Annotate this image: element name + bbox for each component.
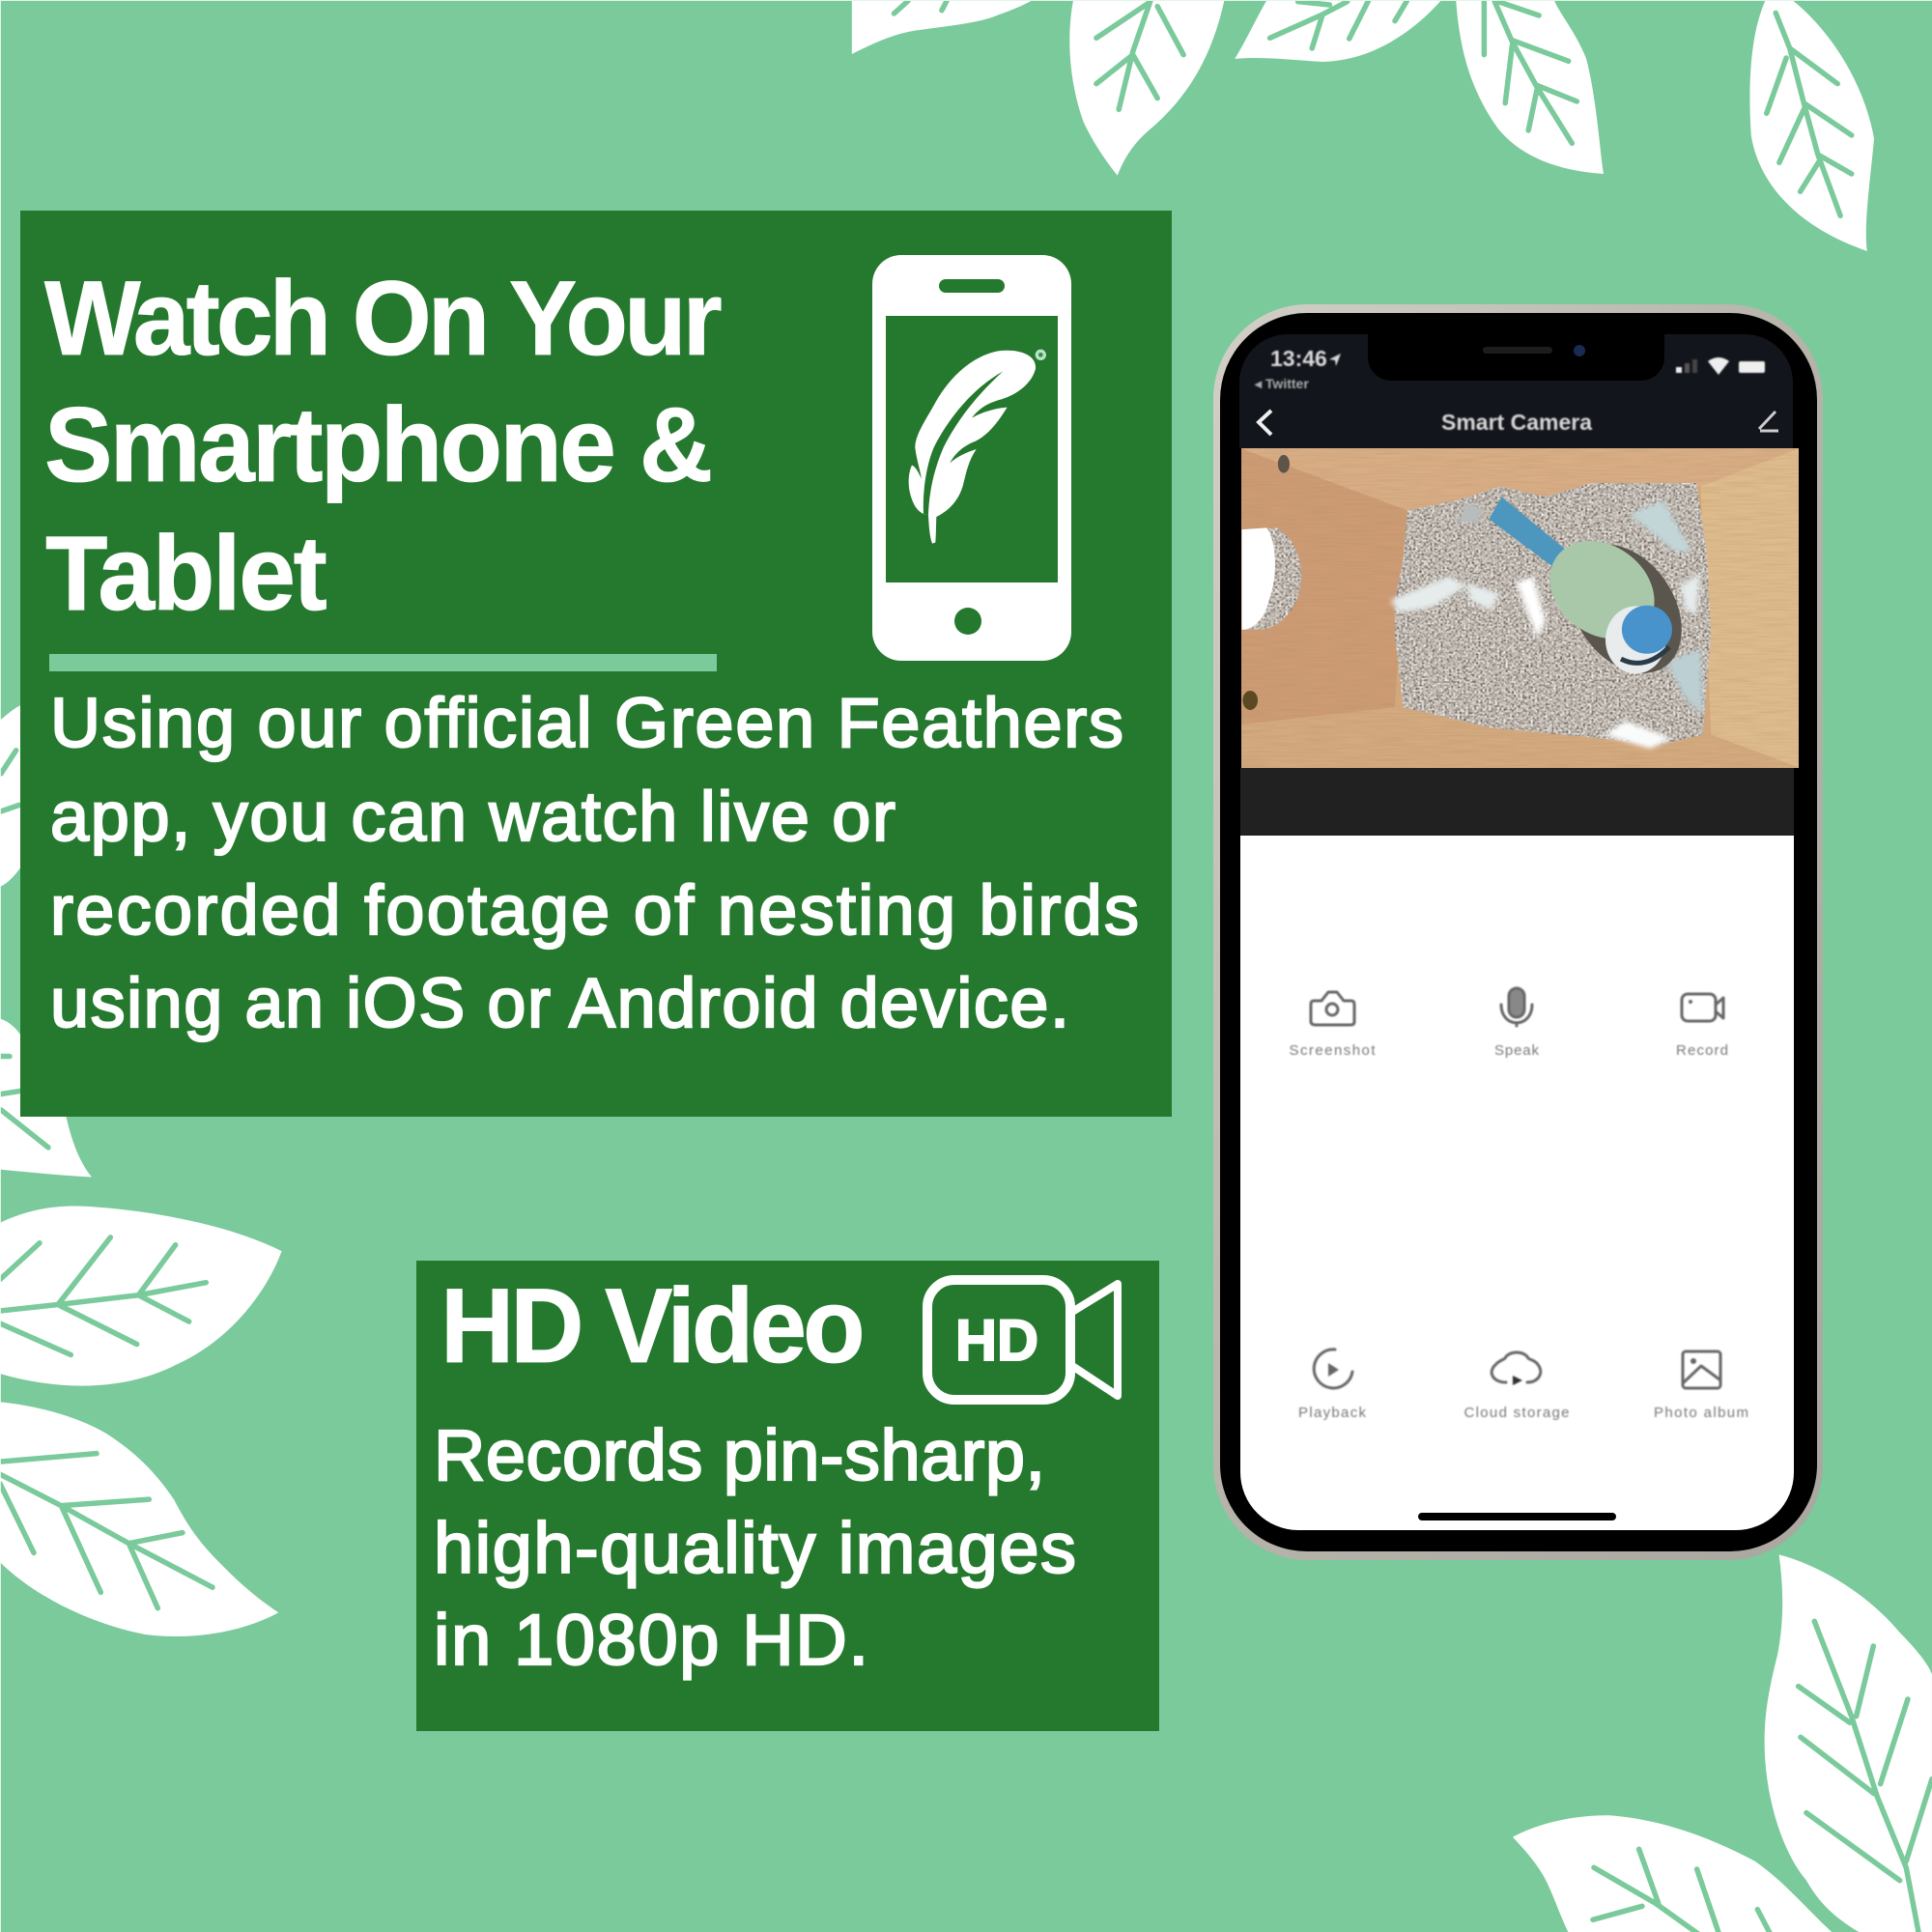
home indicator [1418, 1513, 1616, 1520]
control: screenshot [1289, 992, 1376, 1059]
body text: Using our official Green Feathers [50, 685, 1123, 762]
control: speak: Speak [1494, 1042, 1540, 1059]
photo: screw holes [1278, 455, 1290, 473]
control: record [1676, 994, 1728, 1059]
status bar: 13:46 [1270, 346, 1327, 371]
app dark band [1240, 768, 1794, 836]
icon: hd video camera [927, 1280, 1118, 1400]
icon: edit pencil [1759, 412, 1778, 431]
body text: in 1080p HD. [434, 1600, 868, 1680]
app controls panel [1240, 836, 1794, 1530]
control: playback: Playback [1298, 1405, 1366, 1421]
status bar: ◂ Twitter [1254, 376, 1309, 391]
control: cloud storage [1464, 1352, 1569, 1421]
body text: app, you can watch live or [50, 779, 895, 856]
app top bar [1239, 328, 1793, 448]
photo: nest [1395, 483, 1711, 745]
leaves: bottom right corner [1513, 1554, 1932, 1932]
heading: hd video: HD Video [440, 1265, 866, 1384]
control: photo album: Photo album [1654, 1405, 1748, 1421]
control: cloud storage: Cloud storage [1464, 1405, 1569, 1421]
phone frame [1213, 304, 1823, 1560]
icon: hd video camera: HD [955, 1308, 1038, 1373]
heading: watch on your smartphone and tablet [44, 258, 723, 632]
body text [50, 685, 1139, 1042]
notch [1368, 328, 1664, 381]
photo: wooden box walls [1241, 448, 1799, 768]
photo: nest bowl shadow [1579, 545, 1682, 673]
smartphone mockup [1213, 304, 1823, 1560]
panel: watch on your smartphone and tablet [20, 211, 1172, 1117]
body text: using an iOS or Android device. [50, 965, 1069, 1042]
body text: high-quality images [434, 1508, 1076, 1588]
photo: feathers [1391, 500, 1703, 749]
status bar [1254, 346, 1765, 391]
heading: watch on your smartphone and tablet: Tablet [45, 513, 327, 632]
icon: back chevron [1259, 411, 1271, 435]
body text: Records pin-sharp, [434, 1415, 1045, 1495]
nest camera photo [1241, 448, 1799, 768]
control: screenshot: Screenshot [1289, 1042, 1376, 1059]
icon: smartphone with feather logo [872, 255, 1071, 661]
body text: recorded footage of nesting birds [50, 872, 1139, 950]
icon: feather [909, 350, 1046, 544]
title: smart camera: Smart Camera [1441, 410, 1592, 435]
photo: blue tag [1489, 497, 1569, 567]
body text [434, 1415, 1076, 1680]
control: speak [1494, 988, 1540, 1059]
leaves: left edge [0, 704, 282, 1636]
heading: watch on your smartphone and tablet: Smartphone & [44, 384, 713, 503]
control: record: Record [1676, 1042, 1728, 1059]
heading underline [49, 654, 717, 671]
leaves: top edge [852, 1, 1874, 251]
control: playback [1298, 1350, 1366, 1421]
panel: hd video [416, 1261, 1159, 1731]
control: photo album [1654, 1351, 1748, 1421]
photo: entrance hole [1242, 527, 1301, 630]
photo: blue tit [1549, 541, 1672, 674]
heading: watch on your smartphone and tablet: Watch On Your [44, 258, 723, 377]
